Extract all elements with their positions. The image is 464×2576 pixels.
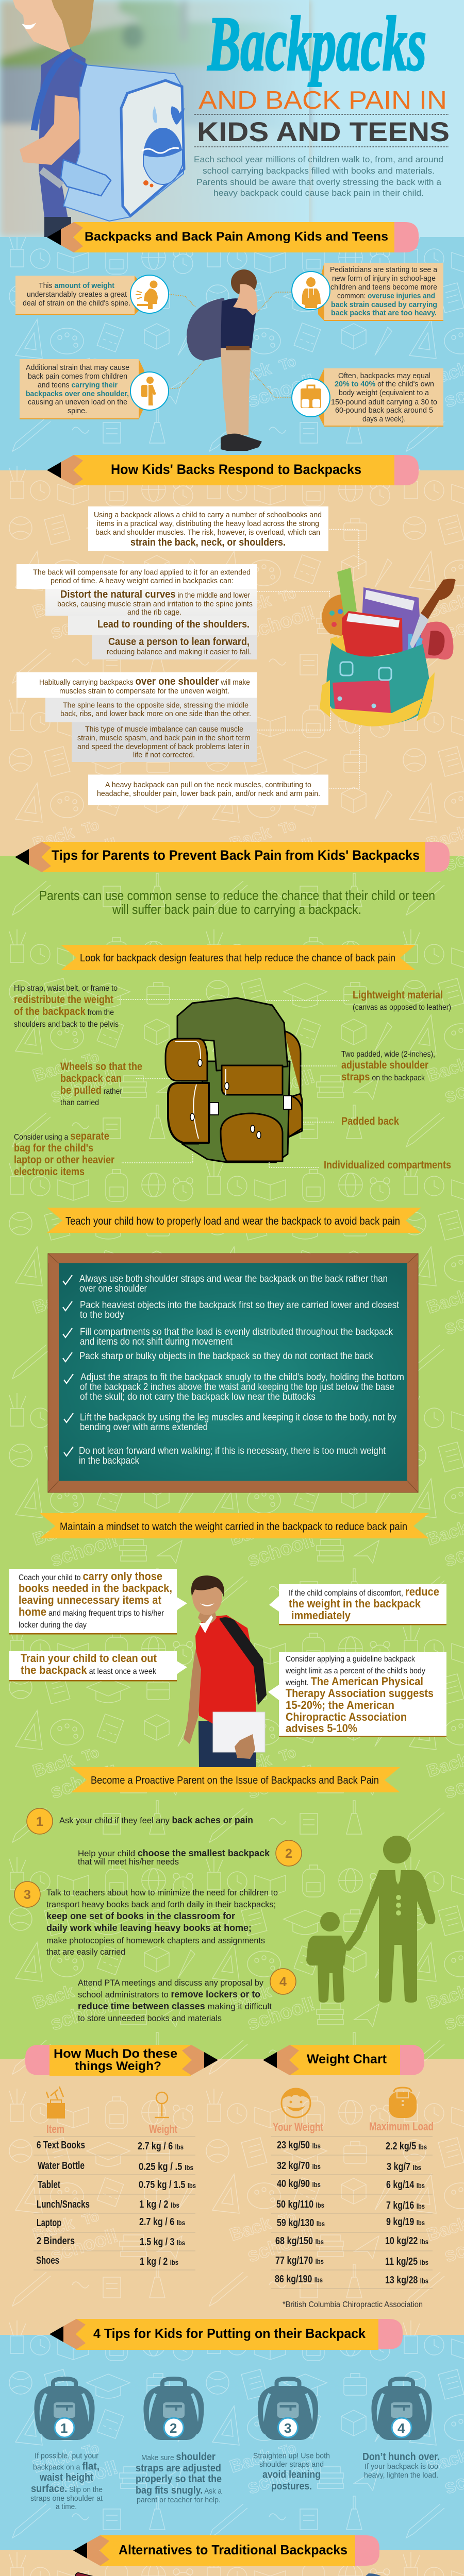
callout: pediatricians: new form of injury in school-age xyxy=(332,275,436,283)
heading pencil: alternatives: Alternatives to Traditional Backpacks xyxy=(119,2542,347,2557)
table: item weights: 1.5 kg / 3 lbs xyxy=(140,2236,185,2248)
ribbon: maintain a mindset: Maintain a mindset to watch the weight carried in the backpack to reduce back pain xyxy=(60,1521,407,1533)
table: weight chart: 23 kg/50 lbs xyxy=(277,2140,321,2151)
table: item weights: 2.7 kg / 6 lbs xyxy=(139,2216,185,2228)
label: compartments xyxy=(269,1159,451,1171)
text stack: effects of a heavy weight: backs, causing muscle strain and irritation to the spine joints xyxy=(57,600,253,608)
callout: one shoulder: causing an uneven load on the xyxy=(28,398,127,406)
text stack: effects of a heavy weight: Distort the natural curves in the middle and lower xyxy=(60,589,250,600)
chalkboard: loading and wearing checklist: Pack sharp or bulky objects in the backpack so they do not contact the back xyxy=(79,1351,373,1362)
heading pencil: how kids backs respond: How Kids' Backs Respond to Backpacks xyxy=(111,462,361,477)
chalkboard: loading and wearing checklist: Adjust the straps to fit the backpack snugly to the child's body, holding the bottom xyxy=(80,1372,404,1383)
table: weight chart: 40 kg/90 lbs xyxy=(277,2178,321,2190)
speech box: carry only needed books xyxy=(9,1569,187,1634)
callout: percent of body weight xyxy=(318,368,443,427)
step 4: to store unneeded books and materials xyxy=(78,2013,222,2023)
speech box: guideline weight limit: 15-20%; the American xyxy=(286,1699,394,1711)
chalkboard: loading and wearing checklist: Lift the backpack by using the leg muscles and keeping it close to the body, not by xyxy=(80,1412,396,1423)
chalkboard: loading and wearing checklist: over one shoulder xyxy=(79,1283,147,1294)
heading pencil: how kids backs respond xyxy=(47,455,419,485)
tip 2: 2 xyxy=(170,2420,177,2436)
callout: percent of body weight: 60-pound back pack around 5 xyxy=(335,406,433,415)
label: separate bag: bag for the child's xyxy=(14,1142,93,1154)
label: wheels: backpack can xyxy=(60,1073,122,1084)
table: weight chart: 10 kg/22 lbs xyxy=(385,2235,428,2247)
speech box: guideline weight limit: weight. The American Physical xyxy=(285,1675,423,1688)
chalkboard: loading and wearing checklist: and items do not shift during movement xyxy=(80,1336,233,1347)
callout: one shoulder: and teens carrying their xyxy=(38,381,118,389)
tip 3 xyxy=(253,2379,330,2492)
label: wheels: be pulled rather xyxy=(60,1084,123,1096)
tip 4: heavy, lighten the load. xyxy=(364,2471,438,2480)
table: item weights: 2.7 kg / 6 lbs xyxy=(138,2141,184,2152)
label: redistribute weight xyxy=(14,984,201,1029)
text stack: effects of a heavy weight: Cause a person to lean forward, xyxy=(108,636,250,648)
label: shoulder straps: adjustable shoulder xyxy=(341,1059,428,1071)
label: lightweight material xyxy=(266,989,451,1012)
heading pencil: weight chart: Weight Chart xyxy=(307,2052,387,2066)
callout: pediatricians: common: overuse injuries and xyxy=(337,292,435,300)
label: redistribute weight: redistribute the weight xyxy=(14,994,113,1006)
chalkboard: loading and wearing checklist: Pack heaviest objects into the backpack first so they are carried lower and closest xyxy=(80,1300,400,1311)
label: lightweight material: Lightweight material xyxy=(353,989,443,1001)
label: redistribute weight: Hip strap, waist belt, or frame to xyxy=(14,984,118,993)
text stack: one shoulder carrying: and speed the development of back problems later in xyxy=(77,743,250,751)
speech box: guideline weight limit xyxy=(268,1652,446,1737)
tip 2: straps are adjusted xyxy=(136,2463,221,2474)
ribbon: design features: Look for backpack design features that help reduce the chance of back pain xyxy=(80,953,395,964)
table: item weights: 1 kg / 2 lbs xyxy=(140,2256,178,2267)
speech box: carry only needed books: leaving unnecessary items at xyxy=(19,1594,162,1606)
text stack: effects of a heavy weight: The back will compensate for any load applied to it for an extended xyxy=(33,569,251,577)
step 2: that will meet his/her needs xyxy=(78,1857,179,1867)
chalkboard: loading and wearing checklist: of the skull; do not carry the backpack low near the buttocks xyxy=(80,1392,316,1402)
table: weight chart: 13 kg/28 lbs xyxy=(385,2275,428,2286)
label: shoulder straps xyxy=(301,1050,435,1083)
text stack: effects of a heavy weight xyxy=(16,564,257,659)
tip 3: shoulder straps and xyxy=(259,2460,324,2469)
icon: child with backpack xyxy=(130,372,169,410)
heading pencil: weight chart xyxy=(263,2045,424,2075)
tip 1: a time. xyxy=(56,2502,77,2511)
speech box: guideline weight limit: Therapy Association suggests xyxy=(286,1687,434,1700)
text box: risk of overload: strain the back, neck, or shoulders. xyxy=(130,537,286,548)
text box: risk of overload: back and shoulder muscles. The risk, however, is overload, which can xyxy=(95,529,320,537)
text box: risk of overload: Using a backpack allows a child to carry a number of schoolbooks and xyxy=(94,511,322,519)
icon: sitting figure xyxy=(130,275,169,313)
callout: pediatricians: Pediatricians are starting to see a xyxy=(330,266,438,274)
table: weight chart: Your Weight xyxy=(273,2121,324,2133)
callout: amount of weight: deal of strain on the child's spine. xyxy=(23,299,130,308)
text box: neck muscles: A heavy backpack can pull on the neck muscles, contributing to xyxy=(105,781,311,789)
heading pencil: how much do these things weigh xyxy=(25,2045,218,2076)
photo: boy holding head wearing backpack xyxy=(169,269,291,451)
speech box: reduce the weight: If the child complains of discomfort, reduce xyxy=(289,1585,439,1598)
ribbon: proactive parent: Become a Proactive Parent on the Issue of Backpacks and Back Pain xyxy=(91,1775,379,1786)
text stack: effects of a heavy weight: and the rib cage. xyxy=(127,608,181,617)
label: separate bag xyxy=(14,1130,193,1178)
chalkboard: loading and wearing checklist: to the body xyxy=(80,1310,124,1320)
callout: percent of body weight: body weight (equivalent to a xyxy=(339,389,429,397)
callout: amount of weight: This amount of weight xyxy=(39,282,114,290)
tip 3: postures. xyxy=(271,2481,312,2492)
ribbon: maintain a mindset xyxy=(40,1513,429,1538)
text stack: effects of a heavy weight: Lead to rounding of the shoulders. xyxy=(97,619,250,630)
intro paragraph: Each school year millions of children walk to, from, and around xyxy=(194,155,443,164)
tip 4: 4 xyxy=(397,2420,405,2436)
photo: teen with backpack and notebook xyxy=(184,1575,267,1767)
text stack: one shoulder carrying: muscles strain to compensate for the uneven weight. xyxy=(59,687,229,696)
illustration: green hiking backpack xyxy=(165,998,302,1162)
label: redistribute weight: of the backpack from the xyxy=(14,1006,114,1018)
title: and back pain in: AND BACK PAIN IN xyxy=(198,87,447,114)
table: item weights: Laptop xyxy=(37,2217,61,2229)
table: weight chart: Maximum Load xyxy=(369,2120,434,2133)
callout: one shoulder xyxy=(20,359,144,419)
speech box: clean out the backpack: the backpack at least once a week xyxy=(21,1664,156,1676)
ribbon: teach your child: Teach your child how to properly load and wear the backpack to avoid back pain xyxy=(65,1215,400,1227)
table: weight chart: 2.2 kg/5 lbs xyxy=(386,2141,427,2152)
tip 2: Make sure shoulder xyxy=(141,2451,216,2463)
step 4: Attend PTA meetings and discuss any proposal by xyxy=(78,1978,263,1988)
text stack: one shoulder carrying: strain, muscle spasm, and back pain in the short term xyxy=(77,734,251,742)
heading pencil: backpacks and back pain: Backpacks and Back Pain Among Kids and Teens xyxy=(85,230,388,244)
label: wheels xyxy=(60,1061,170,1107)
speech box: carry only needed books: Coach your child to carry only those xyxy=(19,1570,162,1583)
ribbon: proactive parent xyxy=(71,1767,400,1792)
heading pencil: 4 tips for kids xyxy=(49,2319,403,2350)
text stack: one shoulder carrying xyxy=(16,672,257,762)
table: item weights: Water Bottle xyxy=(38,2160,85,2172)
speech box: reduce the weight: the weight in the backpack xyxy=(289,1597,421,1610)
speech box: guideline weight limit: weight limit as a percent of the child's body xyxy=(285,1667,425,1675)
table: weight chart: 68 kg/150 lbs xyxy=(275,2235,324,2247)
heading pencil: tips for parents xyxy=(15,842,450,872)
tip 1: backpack on a flat, xyxy=(33,2461,100,2472)
intro text: common sense xyxy=(39,888,435,917)
tip 1: straps one shoulder at xyxy=(30,2494,103,2503)
step 1: 1 xyxy=(36,1815,43,1829)
speech box: carry only needed books: home and making frequent trips to his/her xyxy=(19,1605,164,1618)
table: item weights: Lunch/Snacks xyxy=(37,2199,90,2210)
table: item weights: 0.25 kg / .5 lbs xyxy=(139,2161,193,2173)
speech box: clean out the backpack xyxy=(9,1651,187,1682)
step 3: daily work while leaving heavy books at home; xyxy=(46,1923,252,1933)
icon: parent holding child's hand xyxy=(306,1836,435,2003)
callout: percent of body weight: 150-pound adult carrying a 30 to xyxy=(331,398,437,406)
label: shoulder straps: straps on the backpack xyxy=(341,1071,425,1083)
text stack: one shoulder carrying: back, ribs, and lower back more on one side than the other. xyxy=(60,710,251,718)
chalkboard: loading and wearing checklist: of the backpack 2 inches above the waist and keeping the top just below the base xyxy=(80,1382,394,1393)
tip 1: 1 xyxy=(60,2420,68,2436)
label: padded back: Padded back xyxy=(341,1115,399,1127)
illustration: colorful school backpack xyxy=(257,530,456,788)
step 4: school administrators to remove lockers or to xyxy=(78,1989,260,1999)
intro text: common sense: will suffer back pain due to carrying a backpack. xyxy=(112,902,361,917)
ribbon: teach your child xyxy=(47,1208,421,1233)
tip 4: If your backpack is too xyxy=(364,2462,438,2471)
text stack: one shoulder carrying: This type of muscle imbalance can cause muscle xyxy=(85,725,243,734)
speech box: guideline weight limit: advises 5-10% xyxy=(286,1722,357,1735)
callout: amount of weight xyxy=(15,276,140,315)
step 1 xyxy=(27,1808,253,1834)
speech box: guideline weight limit: Chiropractic Association xyxy=(286,1710,407,1723)
step 3: Talk to teachers about how to minimize the need for children to xyxy=(46,1888,278,1897)
callout: pediatricians: back strain caused by carrying xyxy=(331,301,437,309)
callout: percent of body weight: days a week). xyxy=(362,415,406,423)
step 3 xyxy=(14,1882,278,1957)
step 1: Ask your child if they feel any back aches or pain xyxy=(59,1815,253,1825)
step 3: transport heavy books back and forth daily in their backpacks; xyxy=(46,1900,276,1909)
callout: pediatricians: children and teens become more xyxy=(330,283,437,292)
step 4: reduce time between classes making it difficult xyxy=(78,2001,272,2011)
speech box: guideline weight limit: Consider applying a guideline backpack xyxy=(286,1655,415,1664)
speech box: carry only needed books: books needed in the backpack, xyxy=(19,1582,172,1595)
speech box: clean out the backpack: Train your child to clean out xyxy=(21,1652,157,1665)
table: weight chart: 11 kg/25 lbs xyxy=(385,2256,428,2267)
table: item weights xyxy=(34,2087,196,2270)
step 3: make photocopies of homework chapters and assignments xyxy=(46,1936,265,1945)
chalkboard: loading and wearing checklist: Fill compartments so that the load is evenly distributed throughout the backpack xyxy=(80,1327,393,1337)
text stack: one shoulder carrying: Habitually carrying backpacks over one shoulder will make xyxy=(39,676,250,687)
heading pencil: 4 tips for kids: 4 Tips for Kids for Putting on their Backpack xyxy=(93,2326,366,2341)
label: wheels: Wheels so that the xyxy=(60,1061,142,1073)
tip 4: Don’t hunch over. xyxy=(362,2451,440,2463)
text stack: effects of a heavy weight: period of time. A heavy weight carried in backpacks can: xyxy=(51,577,234,585)
title: kids and teens: KIDS AND TEENS xyxy=(197,117,450,147)
callout: one shoulder: spine. xyxy=(68,407,87,415)
chalkboard: loading and wearing checklist xyxy=(48,1253,418,1493)
heading pencil: how much do these things weigh: How Much Do these xyxy=(54,2047,177,2061)
callout: pediatricians xyxy=(318,263,443,321)
step 3: 3 xyxy=(24,1888,31,1902)
callout: one shoulder: backpacks over one shoulder, xyxy=(26,390,129,398)
label: separate bag: laptop or other heavier xyxy=(14,1154,114,1166)
text stack: effects of a heavy weight: reducing balance and making it easier to fall. xyxy=(107,648,251,656)
tip 1 xyxy=(30,2379,103,2511)
chalkboard: loading and wearing checklist: bending over with arms extended xyxy=(80,1422,208,1433)
tip 3: 3 xyxy=(284,2420,291,2436)
table: weight chart: 6 kg/14 lbs xyxy=(386,2179,425,2191)
intro paragraph xyxy=(194,155,443,198)
table: weight chart: 32 kg/70 lbs xyxy=(277,2160,321,2172)
intro paragraph: heavy backpack could cause back pain in their child. xyxy=(213,188,424,198)
label: separate bag: electronic items xyxy=(14,1166,85,1178)
tip 4 xyxy=(362,2379,440,2480)
table: item weights: 6 Text Books xyxy=(37,2140,85,2151)
table: weight chart xyxy=(271,2088,434,2289)
chalkboard: loading and wearing checklist: Do not lean forward when walking; if this is necessary, there is too much weight xyxy=(79,1446,386,1456)
table: weight chart: 7 kg/16 lbs xyxy=(386,2200,425,2211)
callout: one shoulder: Additional strain that may cause xyxy=(26,364,129,372)
illustration: blue molded backpack xyxy=(345,2573,405,2576)
speech box: reduce the weight xyxy=(269,1584,446,1625)
label: redistribute weight: shoulders and back to the pelvis xyxy=(14,1020,119,1029)
callout: one shoulder: back pain comes from children xyxy=(28,372,127,381)
table: weight chart: 50 kg/110 lbs xyxy=(276,2199,324,2210)
callout: percent of body weight: Often, backpacks may equal xyxy=(338,372,430,380)
label: separate bag: Consider using a separate xyxy=(14,1130,109,1142)
intro paragraph: school carrying backpacks filled with books and materials. xyxy=(203,166,435,176)
tip 2: properly so that the xyxy=(136,2473,222,2485)
table: weight chart: 9 kg/19 lbs xyxy=(386,2216,425,2228)
heading pencil: how much do these things weigh: things Weigh? xyxy=(75,2059,161,2073)
step 4 xyxy=(78,1969,296,2023)
step 2: 2 xyxy=(285,1846,292,1861)
table: item weights: Shoes xyxy=(36,2255,59,2266)
step 2: Help your child choose the smallest backpack xyxy=(78,1848,270,1858)
table: item weights: 1 kg / 2 lbs xyxy=(139,2199,179,2210)
tip 3: Straighten up! Use both xyxy=(253,2452,330,2461)
icon: backpack xyxy=(292,379,330,417)
table: weight chart: 77 kg/170 lbs xyxy=(275,2255,324,2266)
label: wheels: than carried xyxy=(60,1098,99,1107)
heading pencil: backpacks and back pain xyxy=(47,222,419,252)
tip 2 xyxy=(136,2379,222,2504)
tip 1: waist height xyxy=(39,2472,93,2483)
step 3: keep one set of books in the classroom for xyxy=(46,1911,235,1921)
table: weight chart: 86 kg/190 lbs xyxy=(275,2274,323,2285)
illustration: pink rollerbag xyxy=(59,2572,103,2576)
step 4: 4 xyxy=(279,1975,287,1989)
label: lightweight material: (canvas as opposed to leather) xyxy=(353,1003,451,1012)
text box: risk of overload: items in a practical way, distributing the heavy load across the strong xyxy=(97,520,319,528)
text stack: one shoulder carrying: life if not corrected. xyxy=(133,751,195,759)
heading pencil: tips for parents: Tips for Parents to Prevent Back Pain from Kids' Backpacks xyxy=(52,848,420,863)
text box: neck muscles xyxy=(88,775,328,805)
callout: amount of weight: understandably creates a great xyxy=(27,291,127,299)
speech box: carry only needed books: locker during the day xyxy=(19,1621,87,1630)
ribbon: design features xyxy=(61,945,416,970)
tip 2: parent or teacher for help. xyxy=(137,2496,221,2504)
icon: doctor xyxy=(292,272,330,310)
table: weight chart: 3 kg/7 lbs xyxy=(387,2161,421,2173)
intro paragraph: Parents should be aware that overly stressing the back with a xyxy=(196,177,442,187)
heading pencil: alternatives xyxy=(73,2535,379,2566)
table: item weights: 2 Binders xyxy=(37,2235,75,2247)
label: shoulder straps: Two padded, wide (2-inches), xyxy=(341,1050,435,1059)
tip 1: surface. Slip on the xyxy=(31,2483,103,2495)
callout: pediatricians: back packs that are too heavy. xyxy=(331,309,437,317)
hero photo: boy with whale backpack xyxy=(0,0,309,237)
chalkboard: loading and wearing checklist: Always use both shoulder straps and wear the backpack on the back rather than xyxy=(79,1274,388,1284)
table: item weights: Weight xyxy=(149,2123,178,2136)
table: item weights: Item xyxy=(46,2123,64,2136)
tip 1: If possible, put your xyxy=(35,2452,98,2461)
tip 3: avoid leaning xyxy=(262,2469,321,2480)
text box: neck muscles: headache, shoulder pain, lower back pain, and/or neck and arm pain. xyxy=(97,790,320,798)
step 3: that are easily carried xyxy=(46,1947,125,1957)
table: weight chart: 59 kg/130 lbs xyxy=(277,2217,325,2229)
tip 2: bag fits snugly. Ask a xyxy=(136,2485,222,2496)
text box: risk of overload xyxy=(88,506,328,551)
callout: percent of body weight: 20% to 40% of the child's own xyxy=(335,380,434,388)
footnote: *British Columbia Chiropractic Association xyxy=(283,2300,423,2309)
table: item weights: 0.75 kg / 1.5 lbs xyxy=(139,2179,196,2191)
step 2 xyxy=(78,1840,302,1867)
chalkboard: loading and wearing checklist: in the backpack xyxy=(79,1455,139,1466)
table: item weights: Tablet xyxy=(38,2179,60,2191)
text stack: one shoulder carrying: The spine leans to the opposite side, stressing the middle xyxy=(63,702,248,710)
speech box: reduce the weight: immediately xyxy=(291,1609,351,1622)
